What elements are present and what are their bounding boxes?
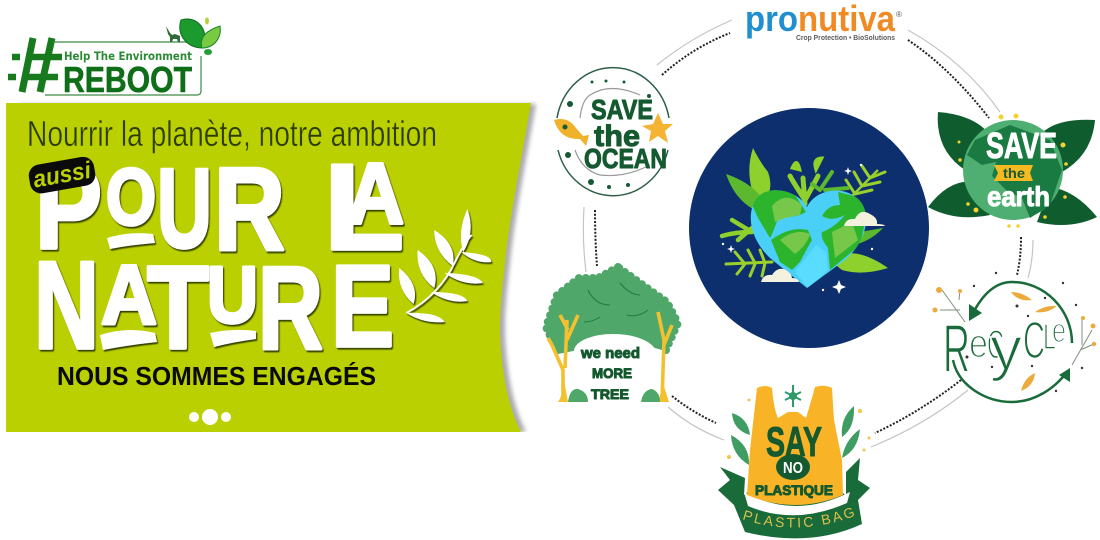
- headline: NATURE: N: [34, 237, 99, 375]
- lettering: y: [990, 315, 1022, 382]
- ribbon: [718, 458, 870, 538]
- twigs: [940, 290, 1094, 365]
- falling leaves: [1011, 292, 1032, 300]
- headline: NATURE: E: [331, 241, 394, 371]
- dots: [565, 80, 651, 189]
- heart globe: [750, 190, 866, 288]
- icon: deer: [166, 26, 180, 42]
- headline: NATURE: A: [101, 248, 157, 342]
- globe: [963, 120, 1063, 220]
- lettering: R: [943, 311, 970, 387]
- text: PLASTIQUE: PLASTIQUE: [755, 482, 833, 498]
- side leaves: [731, 406, 860, 465]
- sparkles: [722, 164, 873, 294]
- clouds: [761, 212, 885, 282]
- banner: the: [994, 165, 1033, 181]
- heading: earth: earth: [987, 181, 1050, 212]
- lettering: e: [1052, 312, 1066, 350]
- yellow dots: [958, 114, 1068, 228]
- banner subtitle: Nourrir la planète, notre ambition: [27, 113, 437, 154]
- bag flower: [785, 385, 801, 407]
- logo: Help The Environment REBOOT: [8, 18, 220, 100]
- headline: NATURE: [34, 237, 394, 375]
- heading: SAVE: SAVE: [591, 94, 653, 125]
- headline: NATURE: R: [258, 243, 323, 375]
- ribbon label: PLASTIC BAG: [743, 508, 854, 528]
- canopy texture: [584, 283, 648, 322]
- text: SAY: SAY: [766, 418, 822, 465]
- registered mark: ®: [896, 10, 902, 19]
- central globe medallion: [689, 108, 929, 348]
- heading: SAVE: SAVE: [986, 125, 1057, 166]
- canopy: [546, 267, 678, 353]
- headline: NATURE: U: [207, 250, 258, 339]
- plants: [722, 148, 888, 276]
- headline: POUR LA: O: [106, 152, 156, 241]
- pronutiva tagline: Crop Protection • BioSolutions: [796, 35, 895, 42]
- icon: starfish: [642, 113, 673, 143]
- circular arrows: [972, 282, 1072, 343]
- trunks: [548, 312, 672, 402]
- badge: say no plastique: [718, 385, 870, 538]
- bushes: [568, 389, 588, 402]
- lettering: C: [1023, 312, 1045, 370]
- icon: leaves: [180, 18, 220, 55]
- confetti: [727, 398, 870, 459]
- lettering: e: [969, 322, 988, 366]
- text: we need: we need: [580, 345, 640, 362]
- text: TREE: TREE: [591, 386, 629, 402]
- badge: aussi: aussi: [31, 157, 94, 193]
- lettering: L: [1043, 316, 1056, 357]
- headline: POUR LA: U: [157, 146, 212, 271]
- headline: POUR LA: L: [324, 139, 404, 275]
- oval: NO: NO: [783, 460, 803, 477]
- heading: OCEAN: OCEAN: [584, 143, 667, 174]
- banner tagline: NOUS SOMMES ENGAGÉS: [57, 361, 376, 391]
- headline: NATURE: T: [147, 242, 209, 374]
- headline: POUR LA: P: [35, 142, 102, 274]
- logo wordmark: REBOOT: [63, 59, 192, 100]
- badge: we need more tree: [546, 267, 678, 402]
- leaves: [928, 112, 1097, 225]
- wavy lines: [575, 88, 650, 176]
- text: MORE: MORE: [592, 365, 632, 381]
- carousel dots: [189, 409, 231, 425]
- logo tagline: Help The Environment: [64, 49, 192, 63]
- badge: save the ocean: [554, 68, 673, 196]
- ring connectors: [583, 20, 1033, 447]
- lettering: C: [987, 323, 1004, 367]
- heading: the: the: [594, 120, 640, 153]
- headline: POUR LA: R: [214, 144, 285, 276]
- oval: NO: [776, 454, 810, 480]
- badge: save the earth: [928, 112, 1097, 228]
- headline: POUR LA: [35, 139, 404, 276]
- badge: save the earth: the: [1003, 165, 1025, 181]
- icon: hashtag: [8, 38, 62, 92]
- icon: fish: [554, 119, 589, 146]
- lettering: [943, 311, 1066, 387]
- bag: [747, 386, 843, 505]
- headline: POUR LA: A: [347, 146, 404, 242]
- panel: green banner: [6, 103, 536, 432]
- icon: olive branch: [399, 209, 491, 322]
- badge: recycle: [932, 272, 1096, 402]
